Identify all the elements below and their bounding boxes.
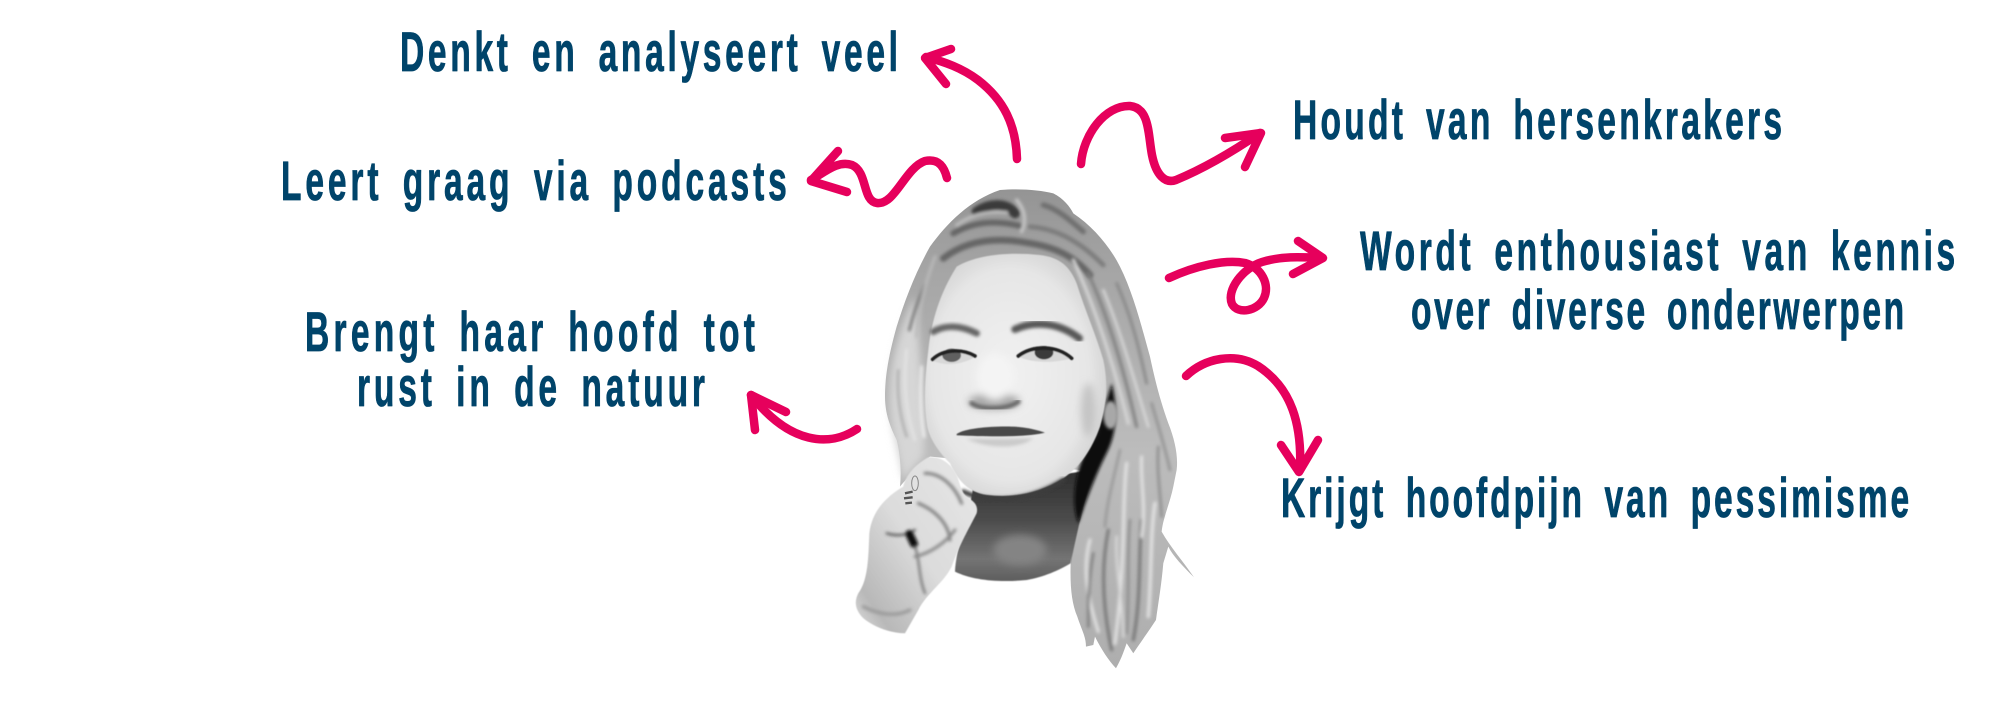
nose [972,402,1018,408]
arrow: to Denkt en analyseert veel [925,49,1017,159]
label: Leert graag via podcasts: Leert graag via podcasts [281,149,787,212]
eyebrows [933,324,1079,338]
label: Houdt van hersenkrakers: Houdt van hersenkrakers [1293,88,1782,151]
ring [904,492,913,503]
portrait: woman with blond hair resting chin on hand [856,189,1194,668]
light left side of hair [890,297,925,480]
finger creases [863,473,962,614]
arrow: to Leert graag via podcasts [811,151,947,203]
ear [1103,401,1118,429]
chin shadow [963,480,1063,499]
label: Wordt enthousiast van kennis: Wordt enthousiast van kennis [1360,219,1955,282]
label: Brengt haar hoofd tot: Brengt haar hoofd tot [305,300,755,363]
dark hair streaks on top [909,200,1103,337]
cheek and nose shading [968,353,1096,437]
neck [955,470,1093,581]
label: Denkt en analyseert veel: Denkt en analyseert veel [400,20,898,83]
dark shadow under hair [1074,383,1116,523]
fine hair strands [898,260,1170,650]
mouth [957,426,1045,447]
label: over diverse onderwerpen: over diverse onderwerpen [1411,278,1904,341]
eyes [932,346,1072,364]
face [925,254,1106,496]
neck highlight [993,535,1047,565]
label: Krijgt hoofdpijn van pessimisme: Krijgt hoofdpijn van pessimisme [1281,466,1909,529]
arrow: to Houdt van hersenkrakers [1081,106,1261,181]
label: rust in de natuur: rust in de natuur [357,355,705,418]
hair [885,189,1194,668]
arrow: to Wordt enthousiast van kennis [1169,241,1323,310]
arrow: to Krijgt hoofdpijn van pessimisme [1186,358,1318,472]
arrow: to Brengt haar hoofd tot [751,395,857,439]
hand [856,457,977,633]
